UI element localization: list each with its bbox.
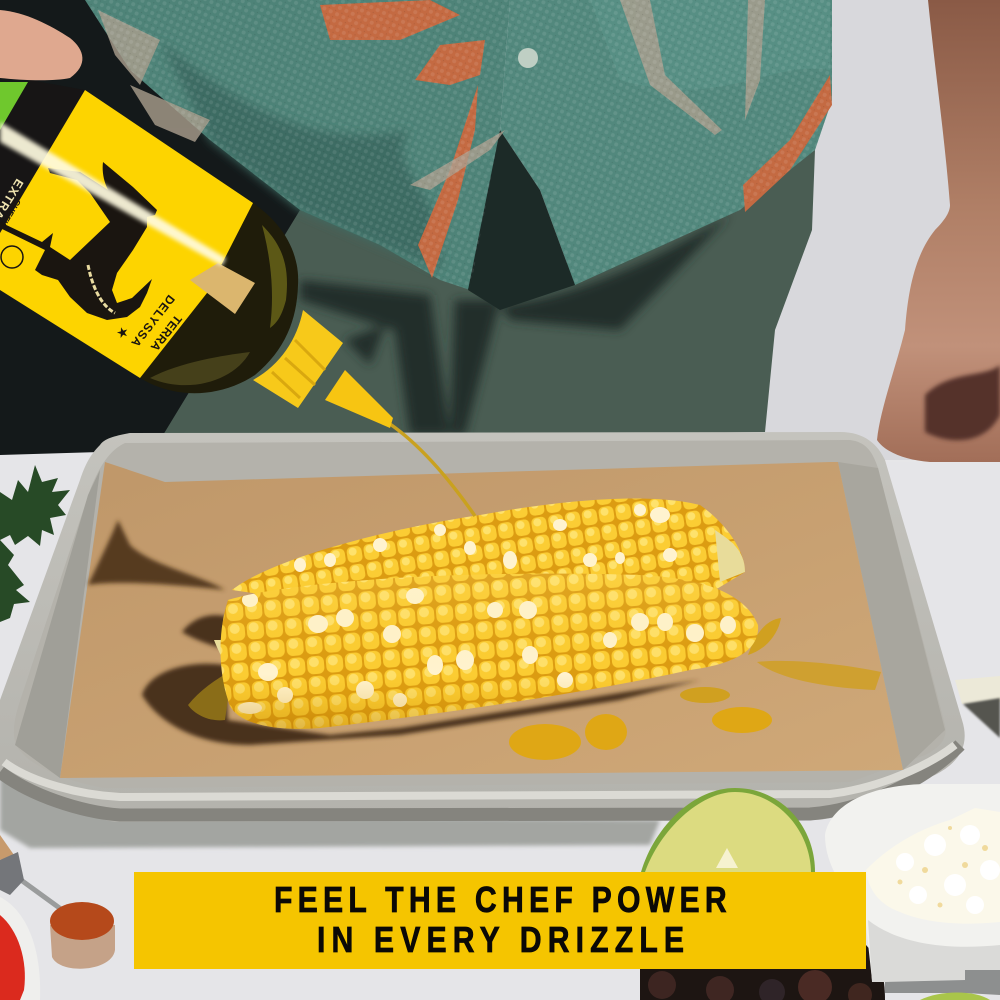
shadows on parchment	[88, 520, 700, 745]
left inner wall light	[15, 470, 100, 778]
yellow cap	[253, 310, 343, 408]
tomato bowl	[0, 897, 40, 1000]
white bowl of feta	[825, 784, 1000, 982]
nozzle	[325, 370, 393, 428]
shadow under tray	[0, 770, 660, 848]
lime half	[641, 788, 815, 872]
shirt button	[518, 48, 538, 68]
shirt print: rust pattern	[320, 0, 832, 278]
right inner wall	[838, 462, 945, 770]
star: ★	[113, 323, 133, 343]
tray rim highlight	[4, 745, 955, 797]
olive oil bottle	[0, 10, 393, 428]
corn husk tip	[715, 530, 745, 582]
headline line one: FEEL THE CHEF POWER	[274, 881, 727, 921]
baking tray	[0, 432, 965, 822]
stag silhouette	[0, 162, 157, 320]
oil drizzle stream	[390, 424, 475, 516]
bowl side	[868, 920, 1000, 982]
tray rim dark underside	[0, 745, 960, 815]
background: wall and dark surround	[0, 0, 1000, 460]
trouser shadows	[300, 215, 730, 435]
cap ridges	[272, 340, 325, 398]
bowl of black beans	[640, 945, 885, 1000]
measuring spoon with spice	[0, 835, 115, 969]
right hand and arm	[877, 0, 1000, 462]
parchment paper	[60, 462, 903, 778]
glass lower glow	[150, 352, 250, 385]
corn shading	[220, 574, 758, 729]
bottle glass	[140, 203, 298, 393]
greens on the table	[0, 465, 70, 622]
thumb	[0, 10, 82, 80]
brand name: TERRA	[148, 312, 185, 354]
brand seal	[1, 246, 23, 268]
corn: back cob	[232, 498, 745, 600]
table highlight and shadow at tray edge	[955, 676, 1000, 738]
olive oil puddles	[188, 618, 881, 760]
green label strip	[0, 82, 28, 130]
headline line two: IN EVERY DRIZZLE	[317, 921, 684, 961]
feta crumbles	[866, 808, 1000, 924]
brand name line two: DELYSSA	[128, 292, 178, 350]
table	[0, 452, 1000, 1000]
shadow between fingers	[925, 365, 1000, 440]
headline banner	[134, 872, 866, 969]
light streak on label	[0, 122, 226, 266]
shirt print: pale pattern	[98, 0, 765, 190]
shirt	[85, 0, 832, 310]
yellow label	[0, 90, 253, 378]
laurel mark	[88, 265, 115, 313]
gold sticker	[190, 263, 255, 314]
corn: left husk tip	[214, 640, 232, 668]
lime slice bottom right	[920, 992, 990, 1000]
glass oil glow	[262, 225, 287, 328]
shirt weave texture	[85, 0, 832, 290]
measuring spoon handle right	[885, 970, 1000, 995]
tray inner wall	[14, 440, 946, 788]
trousers	[160, 150, 815, 440]
black label top	[0, 80, 85, 235]
corn: front cob	[220, 574, 758, 729]
